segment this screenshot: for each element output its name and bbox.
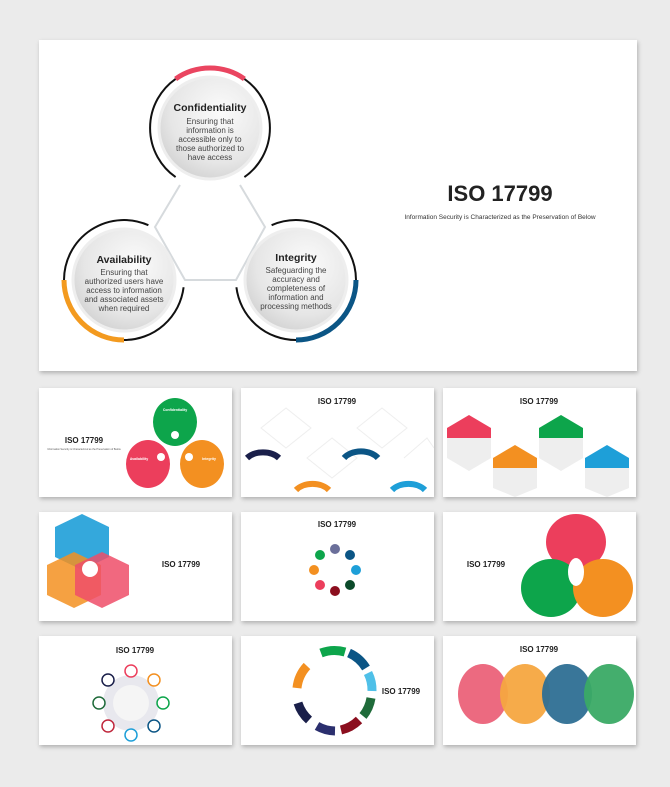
thumbnail 1: three circles: Availability: [130, 457, 148, 461]
title: ISO 17799: [447, 181, 553, 206]
circle: confidentiality: those authorized to: [176, 144, 245, 153]
thumbnail 2: arcs: [241, 388, 434, 497]
circle: integrity: completeness of: [267, 284, 326, 293]
thumbnail 5: process ring: ISO 17799: [318, 520, 357, 529]
circle: integrity: [236, 220, 356, 340]
main slide: [39, 40, 637, 371]
circle: confidentiality: Ensuring that: [186, 117, 234, 126]
thumbnail 1: three circles: ISO 17799: [65, 436, 104, 445]
circle: availability: access to information: [86, 286, 162, 295]
thumbnail 8: segment ring: ISO 17799: [382, 687, 421, 696]
thumbnail 6: three blobs: [443, 512, 636, 621]
circle: integrity: Integrity: [275, 252, 317, 264]
circle: integrity: Safeguarding the: [266, 266, 327, 275]
thumbnail 9: four ovals: [443, 636, 636, 745]
circle: availability: authorized users have: [85, 277, 164, 286]
circle: integrity: information and: [268, 293, 324, 302]
circle: integrity: processing methods: [260, 302, 332, 311]
circle: confidentiality: have access: [188, 153, 232, 162]
circle: availability: Ensuring that: [100, 268, 148, 277]
thumbnail 1: three circles: [39, 388, 232, 497]
thumbnail 1: three circles: Information Security is Characterized as the Preservation of Below: [47, 448, 121, 451]
thumbnail 7: gear process: [39, 636, 232, 745]
thumbnail 8: segment ring: [241, 636, 434, 745]
thumbnail 7: gear process: ISO 17799: [116, 646, 155, 655]
thumbnail 3: hexagons: [443, 388, 636, 497]
thumbnail 1: three circles: Integrity: [202, 457, 216, 461]
circle: availability: [64, 220, 184, 340]
subtitle: Information Security is Characterized as the Preservation of Below: [404, 214, 596, 221]
circle: availability: and associated assets: [84, 295, 164, 304]
circle: confidentiality: information is: [186, 126, 234, 135]
thumbnail 4: hex venn: ISO 17799: [162, 560, 201, 569]
circle: availability: Availability: [96, 254, 152, 266]
thumbnail 1: three circles: Confidentiality: [163, 408, 187, 412]
circle: confidentiality: accessible only to: [178, 135, 242, 144]
thumbnail 6: three blobs: ISO 17799: [467, 560, 506, 569]
circle: confidentiality: [150, 68, 270, 179]
thumbnail 3: hexagons: ISO 17799: [520, 397, 559, 406]
thumbnail 5: process ring: [241, 512, 434, 621]
circle: availability: when required: [98, 304, 149, 313]
thumbnail 4: hex venn: [39, 512, 232, 621]
thumbnail 9: four ovals: ISO 17799: [520, 645, 559, 654]
thumbnail 2: arcs: ISO 17799: [318, 397, 357, 406]
circle: integrity: accuracy and: [272, 275, 320, 284]
circle: confidentiality: Confidentiality: [174, 102, 247, 114]
connector triangle: [155, 185, 265, 280]
